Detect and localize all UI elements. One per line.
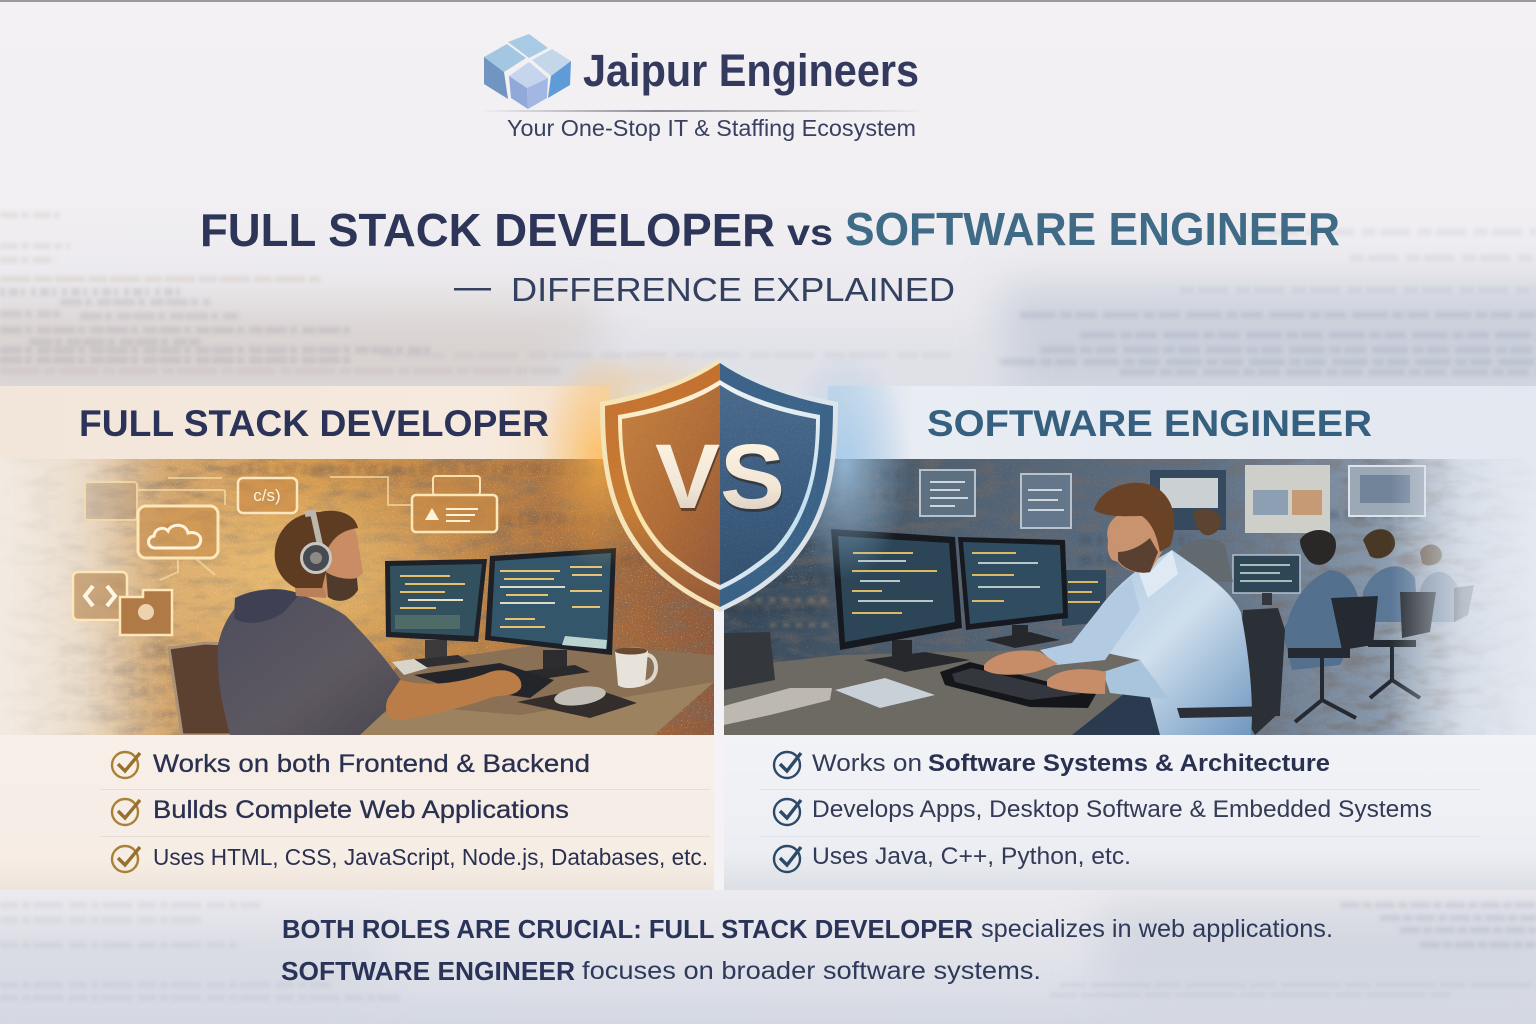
face <box>323 528 363 597</box>
illustration: engineer in office <box>724 459 1536 735</box>
bullet: software systems: Software Systems & Architecture <box>928 750 1330 777</box>
notebook and desk items <box>835 678 935 708</box>
icon: code brackets box <box>73 572 127 620</box>
VS shield emblem <box>540 348 910 612</box>
left panel heading <box>0 386 610 459</box>
main title: SOFTWARE ENGINEER <box>845 203 1340 255</box>
icon: c/s code box <box>238 478 297 513</box>
icon: stacked blue cubes <box>484 34 571 109</box>
chair arm <box>1177 706 1280 718</box>
subtitle: DIFFERENCE EXPLAINED <box>511 271 955 308</box>
person: main engineer <box>984 483 1285 735</box>
summary line one <box>282 914 1333 944</box>
chair <box>167 642 230 735</box>
arm right sleeve <box>1103 660 1170 700</box>
monitor: left <box>385 559 487 668</box>
summary line one: specializes in web applications. <box>981 915 1333 943</box>
forearm and hand <box>386 670 521 720</box>
shirt <box>1072 550 1252 735</box>
icon: document box <box>412 476 497 532</box>
coffee mug <box>615 647 656 688</box>
person: developer with headphones <box>218 511 521 735</box>
hair <box>1094 483 1174 552</box>
arm left sleeve <box>1040 578 1140 665</box>
right panel heading: SOFTWARE ENGINEER <box>927 403 1372 444</box>
logo: Jaipur Engineers <box>480 34 926 141</box>
monitor: right <box>485 548 616 680</box>
monitor: large <box>831 529 970 672</box>
main chair <box>1235 608 1285 735</box>
main title: vs <box>787 212 833 253</box>
main title: FULL STACK DEVELOPER <box>200 204 775 256</box>
face <box>1107 510 1163 573</box>
keyboard <box>414 663 554 698</box>
person: standing colleague <box>1177 509 1233 582</box>
left panel heading: FULL STACK DEVELOPER <box>79 403 549 444</box>
center divider <box>714 600 724 890</box>
neck <box>295 584 326 598</box>
desk <box>724 647 1150 735</box>
bullet: software systems <box>774 750 1330 778</box>
bullet: languages: Uses Java, C++, Python, etc. <box>812 843 1131 870</box>
right bullet list <box>724 735 1536 890</box>
summary line two <box>281 956 1041 986</box>
bottom summary <box>281 914 1333 986</box>
summary line two: focuses on broader software systems. <box>582 957 1041 985</box>
paper on desk <box>392 659 428 675</box>
monitor: second <box>958 537 1068 648</box>
summary line two: SOFTWARE ENGINEER <box>281 956 575 986</box>
shield right half <box>720 358 838 612</box>
icon: cloud <box>138 506 218 580</box>
panel: Full Stack Developer <box>0 386 714 890</box>
bullet: apps and embedded: Develops Apps, Desktop Software & Embedded Systems <box>812 796 1432 823</box>
desk <box>382 646 714 715</box>
hair <box>275 511 358 588</box>
office chairs <box>1288 585 1474 722</box>
bullet: software systems: Works on <box>812 750 922 777</box>
collar <box>1135 550 1178 598</box>
right panel heading <box>828 386 1536 459</box>
hands <box>984 651 1058 675</box>
beard <box>326 572 358 601</box>
headphones <box>305 513 320 545</box>
illustration: developer at dual monitors <box>0 459 714 735</box>
keyboard <box>940 662 1096 708</box>
icon: circuit box <box>85 477 412 520</box>
main title <box>200 203 1340 256</box>
summary line one: BOTH ROLES ARE CRUCIAL: FULL STACK DEVELOPER <box>282 914 973 944</box>
bullet: technologies: Uses HTML, CSS, JavaScript, Node.js, Databases, etc. <box>153 844 708 870</box>
VS shield emblem: VS <box>655 426 785 528</box>
panel: Software Engineer <box>724 386 1536 890</box>
shield left half <box>600 358 720 612</box>
left bullet list <box>0 735 714 890</box>
wordmark: Jaipur Engineers <box>583 45 919 96</box>
icon: c/s code box: c/s) <box>253 486 281 505</box>
background monitors <box>1062 555 1300 626</box>
wall screens <box>920 465 1425 533</box>
icon: folder <box>120 590 172 635</box>
hoodie torso <box>218 592 402 735</box>
bullet: web applications: Bullds Complete Web Applications <box>153 796 569 824</box>
beard <box>1118 538 1158 573</box>
tagline: Your One-Stop IT & Staffing Ecosystem <box>507 115 916 141</box>
person: seated colleagues <box>1282 529 1459 670</box>
bullet: frontend and backend: Works on both Frontend & Backend <box>153 750 590 778</box>
VS lettering: VS <box>656 429 786 531</box>
mouse and pad <box>517 692 637 718</box>
